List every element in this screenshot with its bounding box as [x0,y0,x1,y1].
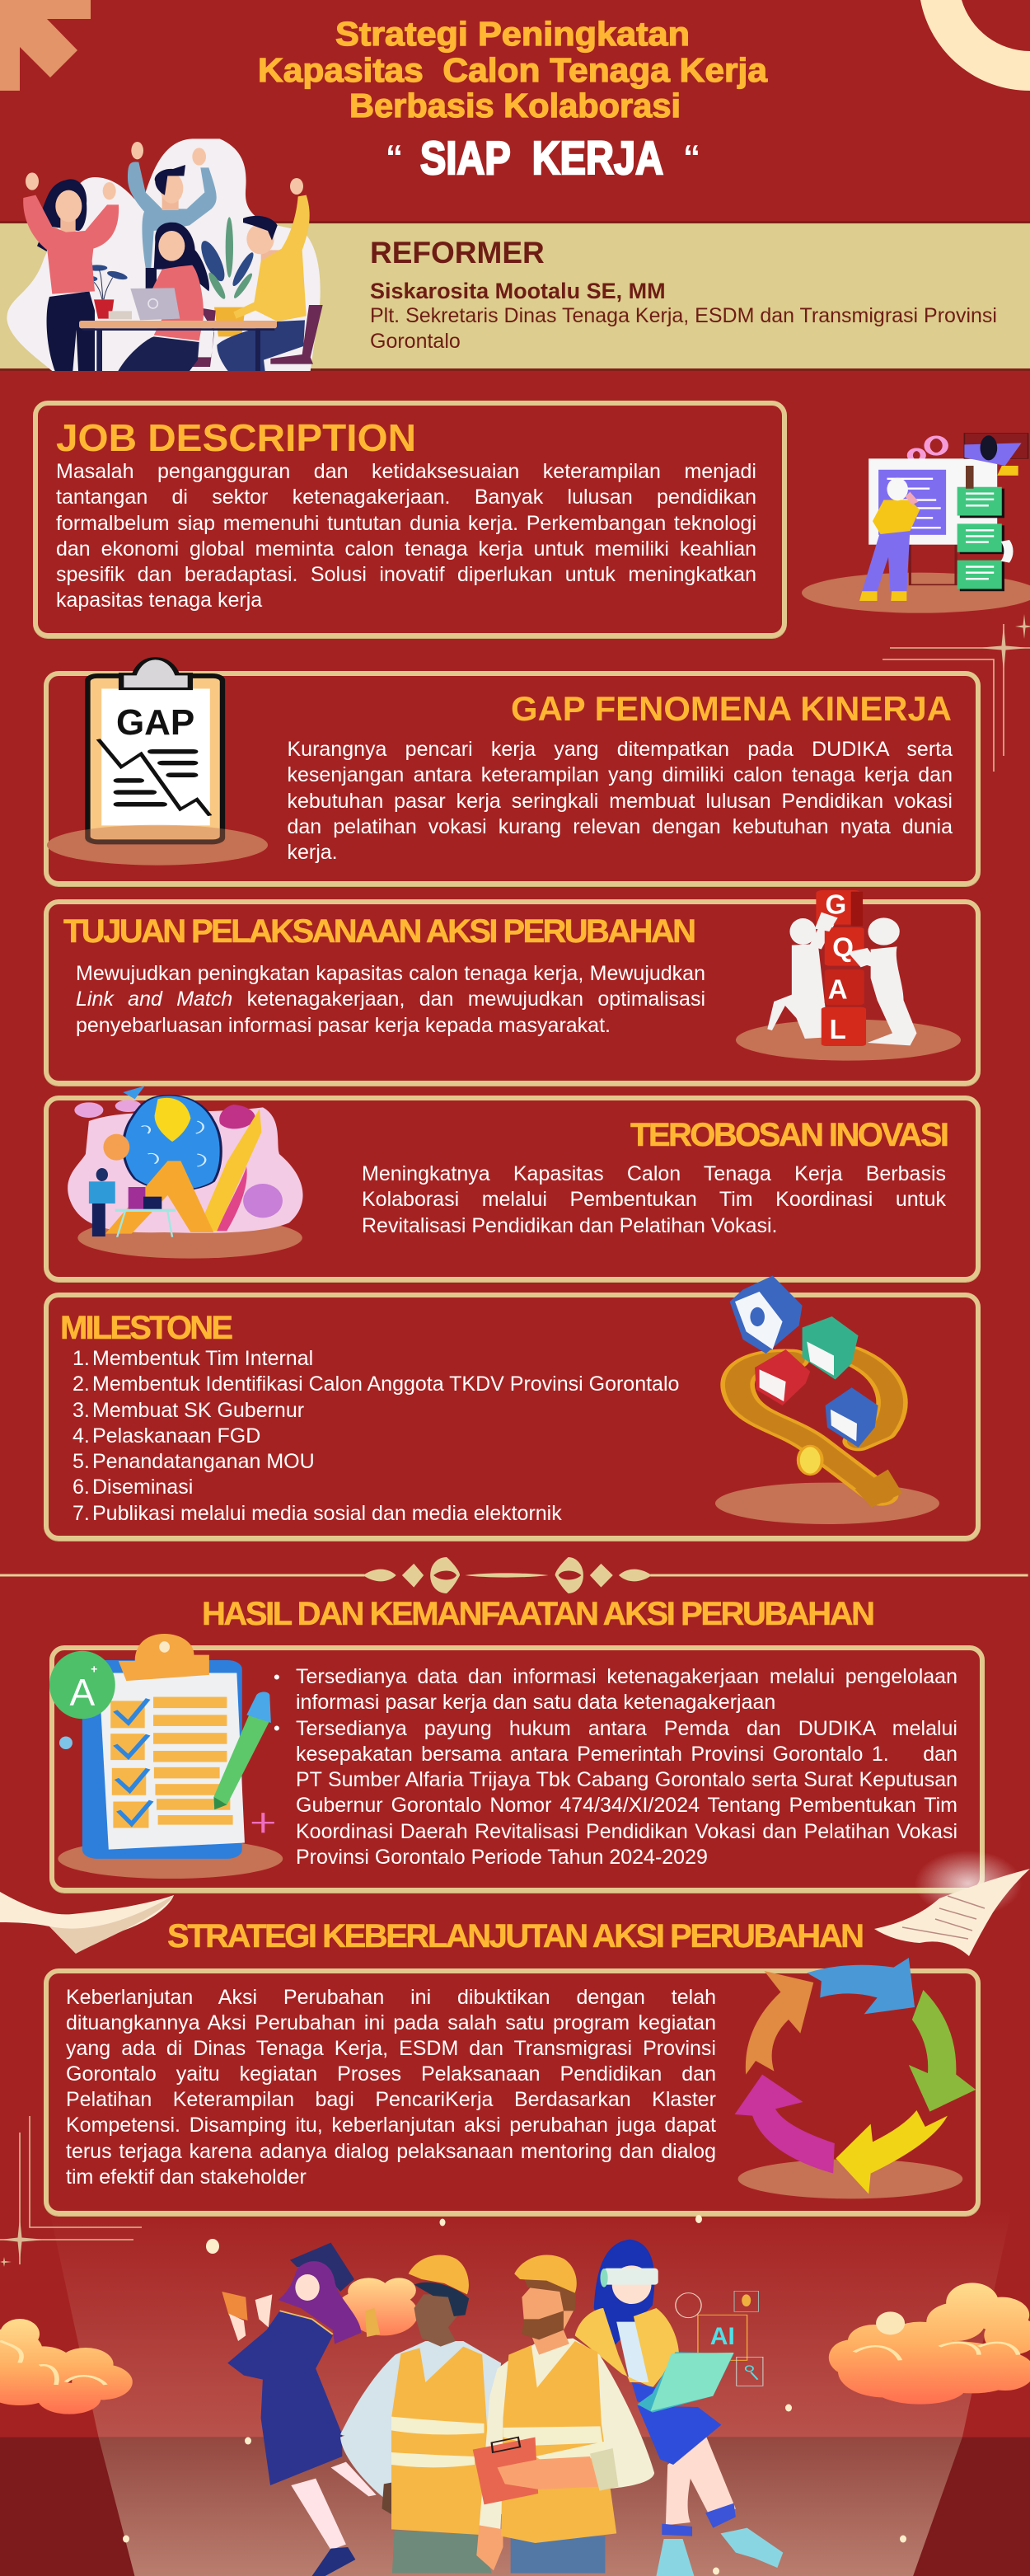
heading: job description: JOB DESCRIPTION [56,416,416,459]
text: job description body: dan ekonomi global meminta calon tenaga kerja untuk memiliki keahlian [56,537,756,561]
text: hasil bullet points: PT Sumber Alfaria Trijaya Tbk Cabang Gorontalo serta Surat Keputusan [296,1768,957,1791]
orange arrows [737,1355,892,1495]
text: strategi body: Pelatihan Keterampilan bagi PencariKerja Berdasarkan Klaster [66,2088,716,2111]
cubes [816,889,866,1046]
text: gap body: kebutuhan pasar kerja seringkali membuat lulusan Pendidikan vokasi [287,790,953,813]
panel: tujuan pelaksanaan [44,899,981,1086]
list: milestone steps: Publikasi melalui media sosial dan media elektornik [92,1502,562,1525]
heading: terobosan inovasi: TEROBOSAN INOVASI [630,1117,949,1153]
text: tujuan body: penyebarluasan informasi pasar kerja kepada masyarakat. [76,1014,611,1037]
paper plane [123,1086,145,1099]
text: strategi body: Kompetensi. Disamping itu, keberlanjutan aksi perubahan juga dapat [66,2114,716,2137]
text: hasil bullet points [274,1665,957,1869]
text: 4. [73,1424,90,1448]
text: 1. [73,1347,90,1370]
text: hasil bullet points: kesepakatan bersama antara Pemerintah Provinsi Gorontalo 1. dan [296,1743,957,1766]
heading: gap fenomena kinerja: GAP FENOMENA KINERJA [511,689,952,728]
chart pie [219,1105,255,1128]
text: strategi body: yang ada di Dinas Tenaga Kerja, ESDM dan Transmigrasi Provinsi [66,2037,716,2060]
text: hasil bullet points: Koordinasi Daerah Revitalisasi Pendidikan Vokasi dan Pelatihan Vokasi [296,1820,957,1843]
text: hasil bullet points: informasi pasar kerja dan satu data ketenagakerjaan [296,1691,775,1714]
text: gap body: Kurangnya pencari kerja yang ditempatkan pada DUDIKA serta [287,738,953,761]
text: strategi body: dituangkannya Aksi Perubahan ini pada salah satu program kegiatan [66,2011,716,2034]
brain [124,1096,221,1190]
cubes: G [825,889,846,919]
text: terobosan body: Revitalisasi Pendidikan dan Pelatihan Vokasi. [362,1213,777,1236]
illustration: gap clipboard [46,657,268,866]
table [79,321,277,371]
text: tujuan body: Mewujudkan peningkatan kapasitas calon tenaga kerja, Mewujudkan [76,962,705,985]
subtitle: siap kerja: SIAP KERJA [420,132,663,185]
text: gap body: kesenjangan antara keterampilan yang dimiliki calon tenaga kerja dan [287,763,953,786]
illustration: students and workers [222,2239,783,2576]
text: terobosan body [362,1162,946,1236]
illustration: cycle arrows [735,1958,976,2199]
list: milestone steps: Membentuk Tim Internal [92,1347,313,1370]
decoration: top-left arrow [0,0,91,91]
figure: woman standing [23,172,119,371]
panel: milestone [44,1293,981,1541]
left figure [767,913,838,1039]
list: milestone steps: Penandatanganan MOU [92,1450,315,1473]
clipboard board [82,1660,242,1859]
people at desk [89,1168,176,1237]
title: Strategi Peningkatan [335,15,690,53]
grade badge: + [91,1662,97,1675]
worker one [340,2255,501,2574]
cubes: Q [832,932,854,963]
whiteboard [868,458,997,545]
ai woman [575,2240,783,2576]
reformer role [370,304,997,353]
heading: strategi keberlanjutan: STRATEGI KEBERLANJUTAN AKSI PERUBAHAN [167,1918,864,1954]
title: Berbasis Kolaborasi [349,87,681,124]
illustration: brain innovation [68,1086,303,1259]
text: • [274,1718,280,1738]
text: terobosan body: Kolaborasi melalui Pembentukan Tim Koordinasi untuk [362,1188,946,1211]
laptop [637,2352,734,2413]
green block [803,1316,859,1380]
text: hasil bullet points: Tersedianya payung hukum antara Pemda dan DUDIKA melalui [296,1716,957,1739]
decoration: cloud right [829,2283,1030,2405]
text: 7. [73,1502,90,1525]
text: terobosan body: Meningkatnya Kapasitas Calon Tenaga Kerja Berbasis [362,1162,946,1185]
graduate [222,2243,380,2576]
heading: hasil dan kemanfaatan: HASIL DAN KEMANFAATAN AKSI PERUBAHAN [202,1596,875,1632]
gears [910,437,945,462]
paper [99,1673,245,1850]
text: • [274,1667,280,1687]
paper tear [98,739,210,816]
cubes: A [828,974,848,1005]
panel: strategi keberlanjutan [44,1968,981,2216]
speech bubble [103,1134,129,1161]
reformer role: Plt. Sekretaris Dinas Tenaga Kerja, ESDM dan Transmigrasi Provinsi [370,304,997,327]
decoration: torn paper left [0,1892,174,1954]
illustration: goal cubes [736,889,961,1061]
decoration: top-right ring [920,0,1030,91]
hands on cubes [815,913,878,967]
figure: man in yellow [217,178,310,371]
reformer heading: REFORMER [370,236,545,270]
panel: job description [33,401,787,638]
board stand [910,544,956,584]
text: tujuan body: Link and Match ketenagakerjaan, dan mewujudkan optimalisasi [76,988,705,1011]
grade badge [49,1651,115,1719]
text: tujuan body [76,962,705,1037]
figure: woman seated with laptop [118,223,209,371]
clipboard [85,659,225,844]
illustration: process arrows [715,1276,939,1524]
list: milestone steps: Membuat SK Gubernur [92,1398,304,1421]
gear art [243,1184,283,1218]
grade badge: A [70,1671,96,1714]
pen [213,1692,271,1809]
text: gap body [287,738,953,864]
panel: terobosan inovasi [44,1096,981,1282]
helper behind board [964,434,1028,489]
text: strategi body: tim efektif dan stakeholder [66,2165,307,2189]
text: 6. [73,1476,90,1499]
subtitle: siap kerja: “ [683,138,700,176]
figure: man at back [128,142,217,289]
reformer role: Gorontalo [370,330,461,353]
title [258,15,768,124]
text: hasil bullet points: Tersedianya data dan informasi ketenagakerjaan melalui pengelolaan [296,1665,957,1688]
text: job description body [56,460,756,612]
text: 3. [73,1398,90,1421]
text: 5. [73,1450,90,1473]
text: gap body: kerja. [287,841,338,864]
text: job description body: kapasitas tenaga kerja [56,589,262,612]
reformer band [0,221,1030,371]
text: hasil bullet points: Gubernur Gorontalo Nomor 474/34/XI/2024 Tentang Pembentukan Tim [296,1794,957,1817]
decoration: sparkle top right [883,615,1030,772]
text: gap body: dan pelatihan vokasi kurang relevan dengan kebutuhan nyata dunia [287,815,953,838]
sparkling dots [123,2215,906,2575]
rising arrow [197,1109,261,1231]
text: strategi body: Keberlanjutan Aksi Perubahan ini dibuktikan dengan telah [66,1986,716,2009]
worker two [473,2255,654,2574]
text: strategi body: Gorontalo yaitu kegiatan Proses Pelaksanaan Pendidikan dan [66,2062,716,2086]
text: job description body: formalbelum siap memenuhi tuntutan dunia kerja. Perkembangan teknologi [56,511,756,534]
illustration: team celebrating [7,138,323,371]
pink blob [68,1107,303,1233]
red block [755,1349,810,1405]
illustration: checklist clipboard [49,1634,283,1879]
decoration: cloud left [0,2319,133,2414]
gear lower right [1005,541,1009,562]
cubes: L [830,1014,846,1044]
text: strategi body: terus terjaga karena adanya dialog pelaksanaan mentoring dan dialog [66,2140,716,2163]
text: job description body: tantangan di sektor ketenagakerjaan. Banyak lulusan pendidikan [56,486,756,509]
heading: milestone: MILESTONE [60,1310,233,1346]
divider ornament [0,1557,1028,1593]
list: milestone steps: Diseminasi [92,1476,193,1499]
clip [119,1634,209,1681]
heading: tujuan pelaksanaan: TUJUAN PELAKSANAAN AKSI PERUBAHAN [63,913,696,950]
ai sign: AI [710,2323,735,2350]
reformer name: Siskarosita Mootalu SE, MM [370,279,666,303]
illustration: person at whiteboard [802,433,1030,613]
cards [957,487,1004,591]
checklist rows [110,1697,233,1828]
list: milestone steps: Membentuk Identifikasi Calon Anggota TKDV Provinsi Gorontalo [92,1372,679,1396]
title: Kapasitas Calon Tenaga Kerja [258,51,768,89]
background stage lighting and floor [0,2248,1030,2576]
panel: gap fenomena kinerja [44,671,981,886]
ai sign [676,2291,763,2386]
chairs [179,305,323,367]
decoration: floating paper right [874,1852,1030,1956]
cloud behind people [339,2278,418,2335]
text: hasil bullet points: Provinsi Gorontalo Periode Tahun 2024-2029 [296,1846,708,1869]
text: strategi body [66,1986,716,2189]
text: job description body: Masalah pengangguran dan ketidaksesuaian keterampilan menjadi [56,460,756,483]
text: job description body: spesifik dan beradaptasi. Solusi inovatif diperlukan untuk meningkatkan [56,563,756,586]
gear block [730,1276,803,1354]
text: 2. [73,1372,90,1396]
panel: hasil dan kemanfaatan [49,1645,985,1893]
right figure [845,917,917,1045]
list: milestone steps: Pelaskanaan FGD [92,1424,260,1448]
decoration: sparkle lower left [0,2116,142,2267]
list: milestone steps [73,1347,679,1525]
clipboard word: GAP [116,702,194,743]
clouds [74,1100,142,1118]
blue block [826,1387,878,1448]
subtitle: siap kerja: “ [386,138,403,176]
person [859,478,920,601]
plants [81,217,256,336]
